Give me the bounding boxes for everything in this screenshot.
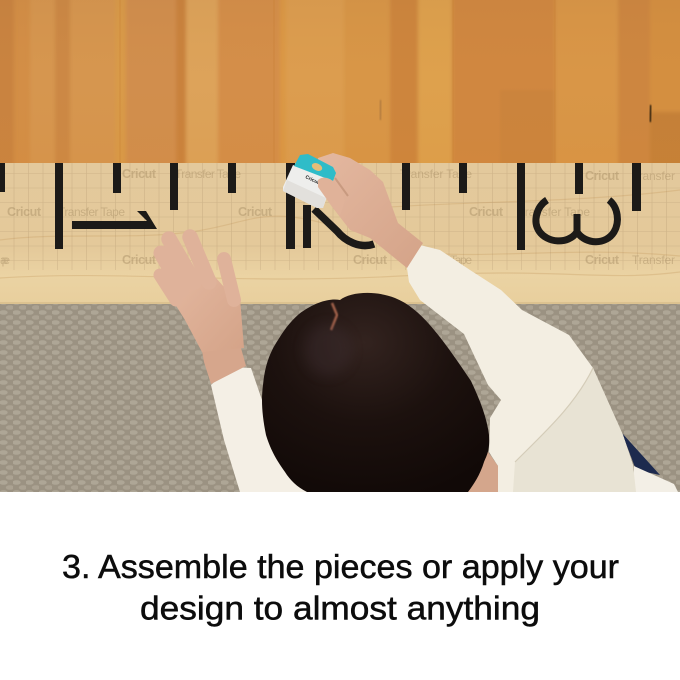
tape watermark labels: Cricut [122, 253, 157, 267]
tape watermark labels: Cricut [238, 205, 273, 219]
title: design to almost anything [140, 590, 540, 626]
tape watermark labels: Transfer [632, 253, 675, 267]
photo: neck [468, 452, 498, 492]
transfer tape grid [0, 163, 680, 270]
tape watermark labels [0, 167, 675, 267]
tape watermark labels: Transfer Tape [400, 167, 472, 181]
ruler tick marks [0, 163, 641, 250]
tape watermark labels: Cricut [353, 253, 388, 267]
title [62, 548, 619, 626]
photo: wood floor background [0, 0, 680, 172]
title: 3. Assemble the pieces or apply your [62, 548, 619, 585]
icon: left hand pressing the board [160, 237, 246, 384]
icon: teal scraper tool: Cricut [304, 174, 320, 186]
ruler numeral 1 [72, 211, 157, 229]
icon: right hand holding scraper [317, 153, 423, 268]
finger over scraper [318, 178, 345, 216]
tape watermark labels: Cricut [122, 167, 157, 181]
tape watermark labels: Cricut [7, 205, 42, 219]
icon: teal scraper tool [283, 154, 336, 208]
tape watermark labels: Transfer Tape [175, 167, 241, 181]
tape watermark labels: Cricut [469, 205, 504, 219]
photo: left sleeve [211, 367, 307, 492]
photo: person's right-side sweater and arm [407, 245, 678, 492]
tape watermark labels: Transfer Tape [518, 205, 590, 219]
tape watermark labels: ape [0, 253, 10, 267]
photo: dark hair [262, 293, 489, 492]
photo: carpet [0, 303, 680, 492]
tape watermark labels: Transfer [632, 169, 675, 183]
tape watermark labels: Transfer Tape [58, 205, 125, 219]
wooden ruler board [0, 163, 680, 304]
ruler numeral 2 [303, 205, 374, 248]
ruler numeral 3 [536, 200, 617, 242]
tape watermark labels: Cricut [585, 253, 620, 267]
tape watermark labels: Cricut [585, 169, 620, 183]
tape watermark labels: Tape [450, 253, 472, 267]
